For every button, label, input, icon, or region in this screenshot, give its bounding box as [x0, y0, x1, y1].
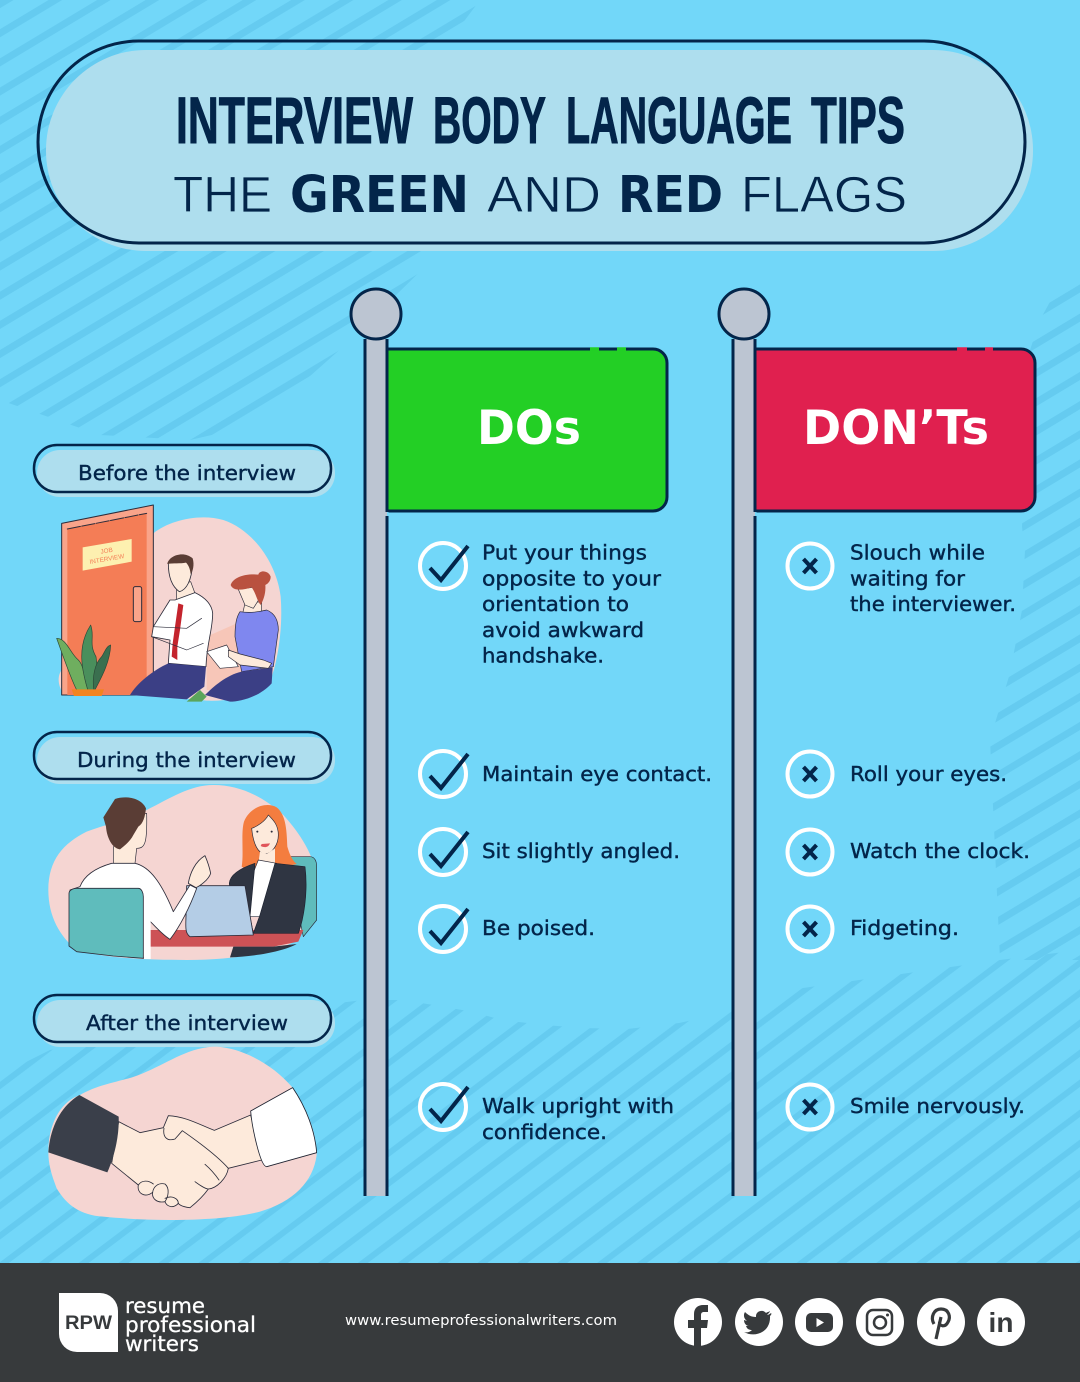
- do: put your things: opposite to your: [482, 566, 662, 590]
- title line 2: [173, 166, 907, 225]
- pill: before the interview: Before the interview: [78, 461, 296, 485]
- flag: DON'Ts: DON’Ts: [803, 401, 989, 456]
- title line 2: FLAGS: [741, 166, 907, 223]
- don't: slouch: waiting for: [850, 566, 966, 590]
- title line 1: INTERVIEW: [176, 83, 413, 157]
- pill: after the interview: After the interview: [86, 1011, 288, 1035]
- title line 2: THE: [173, 166, 272, 223]
- do: eye contact: Maintain eye contact.: [482, 762, 712, 786]
- do: put your things: avoid awkward: [482, 618, 644, 642]
- title line 1: [176, 83, 905, 157]
- do: put your things: handshake.: [482, 644, 604, 668]
- logo: writers: [125, 1332, 199, 1356]
- illustration: man and woman waiting by door: JOB: [100, 547, 113, 556]
- flagpole: DON'Ts: [719, 289, 769, 1196]
- illustration: interview at a desk: [48, 785, 317, 960]
- logo: professional: [125, 1313, 256, 1337]
- don't: slouch: the interviewer.: [850, 592, 1016, 616]
- do: sit angled: Sit slightly angled.: [482, 839, 680, 863]
- icon: facebook: [674, 1298, 722, 1346]
- illustration: man and woman waiting by door: [57, 505, 281, 702]
- icon: linkedin: [977, 1298, 1025, 1346]
- icon: youtube: [795, 1298, 843, 1346]
- do: walk upright: [420, 1084, 674, 1144]
- icon: twitter: [735, 1298, 783, 1346]
- icon: linkedin: in: [989, 1307, 1013, 1338]
- don't: smile nervously: Smile nervously.: [850, 1094, 1025, 1118]
- icon: pinterest: [917, 1298, 965, 1346]
- don't: slouch: Slouch while: [850, 540, 985, 564]
- don't: fidgeting: Fidgeting.: [850, 916, 959, 940]
- don't: watch the clock: Watch the clock.: [850, 839, 1030, 863]
- title line 1: BODY: [433, 83, 546, 157]
- logo: [59, 1293, 256, 1356]
- do: sit angled: [420, 829, 680, 875]
- do: walk upright: Walk upright with: [482, 1094, 674, 1118]
- title line 1: TIPS: [811, 83, 905, 157]
- don't: roll eyes: Roll your eyes.: [850, 762, 1007, 786]
- pill: before the interview: [34, 445, 335, 497]
- illustration: handshake: [48, 1047, 317, 1220]
- pill: during the interview: [34, 732, 335, 784]
- do: be poised: Be poised.: [482, 916, 595, 940]
- title banner: [38, 41, 1033, 251]
- do: eye contact: [420, 751, 712, 797]
- don't: slouch: [788, 540, 1016, 616]
- title line 2: RED: [618, 166, 723, 225]
- do: put your things: [420, 540, 662, 668]
- do: put your things: orientation to: [482, 592, 629, 616]
- don't: smile nervously: [788, 1084, 1025, 1130]
- don't: watch the clock: [788, 830, 1030, 874]
- do: walk upright: confidence.: [482, 1120, 607, 1144]
- do: put your things: Put your things: [482, 540, 647, 564]
- title line 2: AND: [487, 166, 601, 223]
- pill: after the interview: [34, 995, 335, 1047]
- icon: instagram: [856, 1298, 904, 1346]
- website url: www.resumeprofessionalwriters.com: [345, 1313, 617, 1329]
- pill: during the interview: During the interview: [77, 748, 296, 772]
- illustration: man and woman waiting by door: INTERVIEW: [89, 553, 125, 566]
- title line 1: LANGUAGE: [566, 83, 792, 157]
- logo: resume: [125, 1294, 205, 1318]
- don't: roll eyes: [788, 752, 1007, 796]
- flagpole: DOs: [351, 289, 401, 1196]
- logo: RPW: [65, 1313, 112, 1334]
- do: be poised: [420, 906, 595, 952]
- title line 2: GREEN: [290, 166, 469, 225]
- don't: fidgeting: [788, 906, 959, 952]
- flag: DON'Ts: [756, 349, 1035, 511]
- footer: [0, 1263, 1080, 1382]
- flag: DOs: DOs: [477, 401, 581, 456]
- flag: DOs: [388, 349, 667, 511]
